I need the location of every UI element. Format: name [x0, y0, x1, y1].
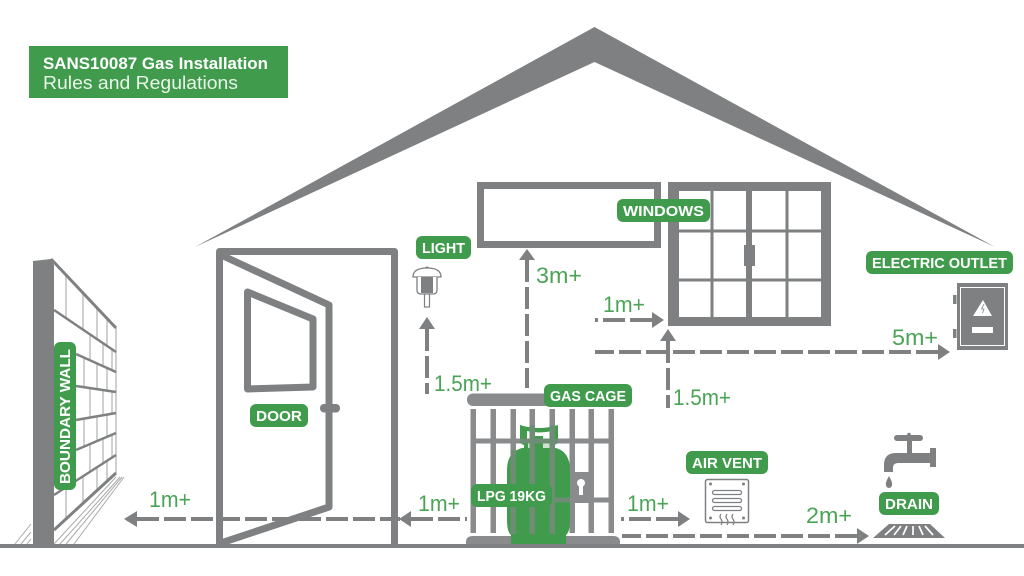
distance: door 1m+: 1m+: [418, 491, 460, 516]
arrow: door 1m: [399, 511, 467, 527]
arrow: top window 3m: [519, 249, 535, 388]
distance: light 1.5m+: 1.5m+: [434, 371, 492, 396]
arrow: window 1m: [595, 312, 664, 328]
arrow: electric outlet 5m: [595, 344, 950, 360]
distance: drain 2m+: 2m+: [806, 503, 852, 528]
label: light: [416, 236, 471, 259]
arrow: drain 2m: [622, 528, 869, 544]
label: electric outlet: [866, 251, 1013, 274]
label: windows: WINDOWS: [623, 204, 704, 220]
arrow: light 1.5m: [419, 317, 435, 394]
left window: [480, 186, 658, 244]
title banner: Rules and Regulations: [43, 73, 238, 93]
label: drain: [879, 492, 939, 515]
distance: 5m+: 5m+: [892, 325, 938, 350]
label: gas cage: GAS CAGE: [550, 389, 626, 405]
icon: drain: [873, 524, 945, 538]
label: light: LIGHT: [422, 241, 465, 257]
title banner: [29, 46, 288, 98]
label: door: [250, 404, 308, 427]
boundary wall: [15, 259, 124, 546]
label: boundary wall: BOUNDARY WALL: [58, 349, 74, 484]
lpg cylinder: [507, 425, 570, 544]
label: electric outlet: ELECTRIC OUTLET: [872, 256, 1007, 272]
distance: window 1m+: 1m+: [603, 292, 645, 317]
right window: [668, 182, 831, 326]
distance: window 1.5m+: 1.5m+: [673, 385, 731, 410]
arrow: boundary wall 1m: [124, 511, 400, 527]
label: drain: DRAIN: [885, 497, 933, 513]
gas cage: [466, 394, 620, 544]
label: lpg 19kg: LPG 19KG: [477, 489, 546, 505]
label: lpg 19kg: [471, 484, 552, 507]
arrow: window 1.5m: [660, 329, 676, 408]
arrow: air vent 1m: [621, 511, 690, 527]
label: gas cage: [544, 384, 632, 407]
label: air vent: AIR VENT: [692, 456, 762, 472]
icon: light: [413, 266, 441, 307]
icon: electric outlet box: [953, 283, 1008, 350]
icon: air vent: [706, 480, 748, 525]
door: [220, 252, 394, 546]
distance: 3m+: 3m+: [536, 263, 582, 288]
label: door: DOOR: [256, 409, 303, 425]
label: windows: [617, 199, 710, 222]
title banner: SANS10087 Gas Installation: [43, 54, 268, 73]
distance: vent 1m+: 1m+: [627, 491, 669, 516]
icon: tap: [884, 433, 936, 488]
distance: wall 1m+: 1m+: [149, 487, 191, 512]
ground line: [0, 544, 1024, 548]
label: boundary wall: [54, 342, 76, 490]
label: air vent: [686, 451, 768, 474]
house roof: [195, 27, 995, 247]
